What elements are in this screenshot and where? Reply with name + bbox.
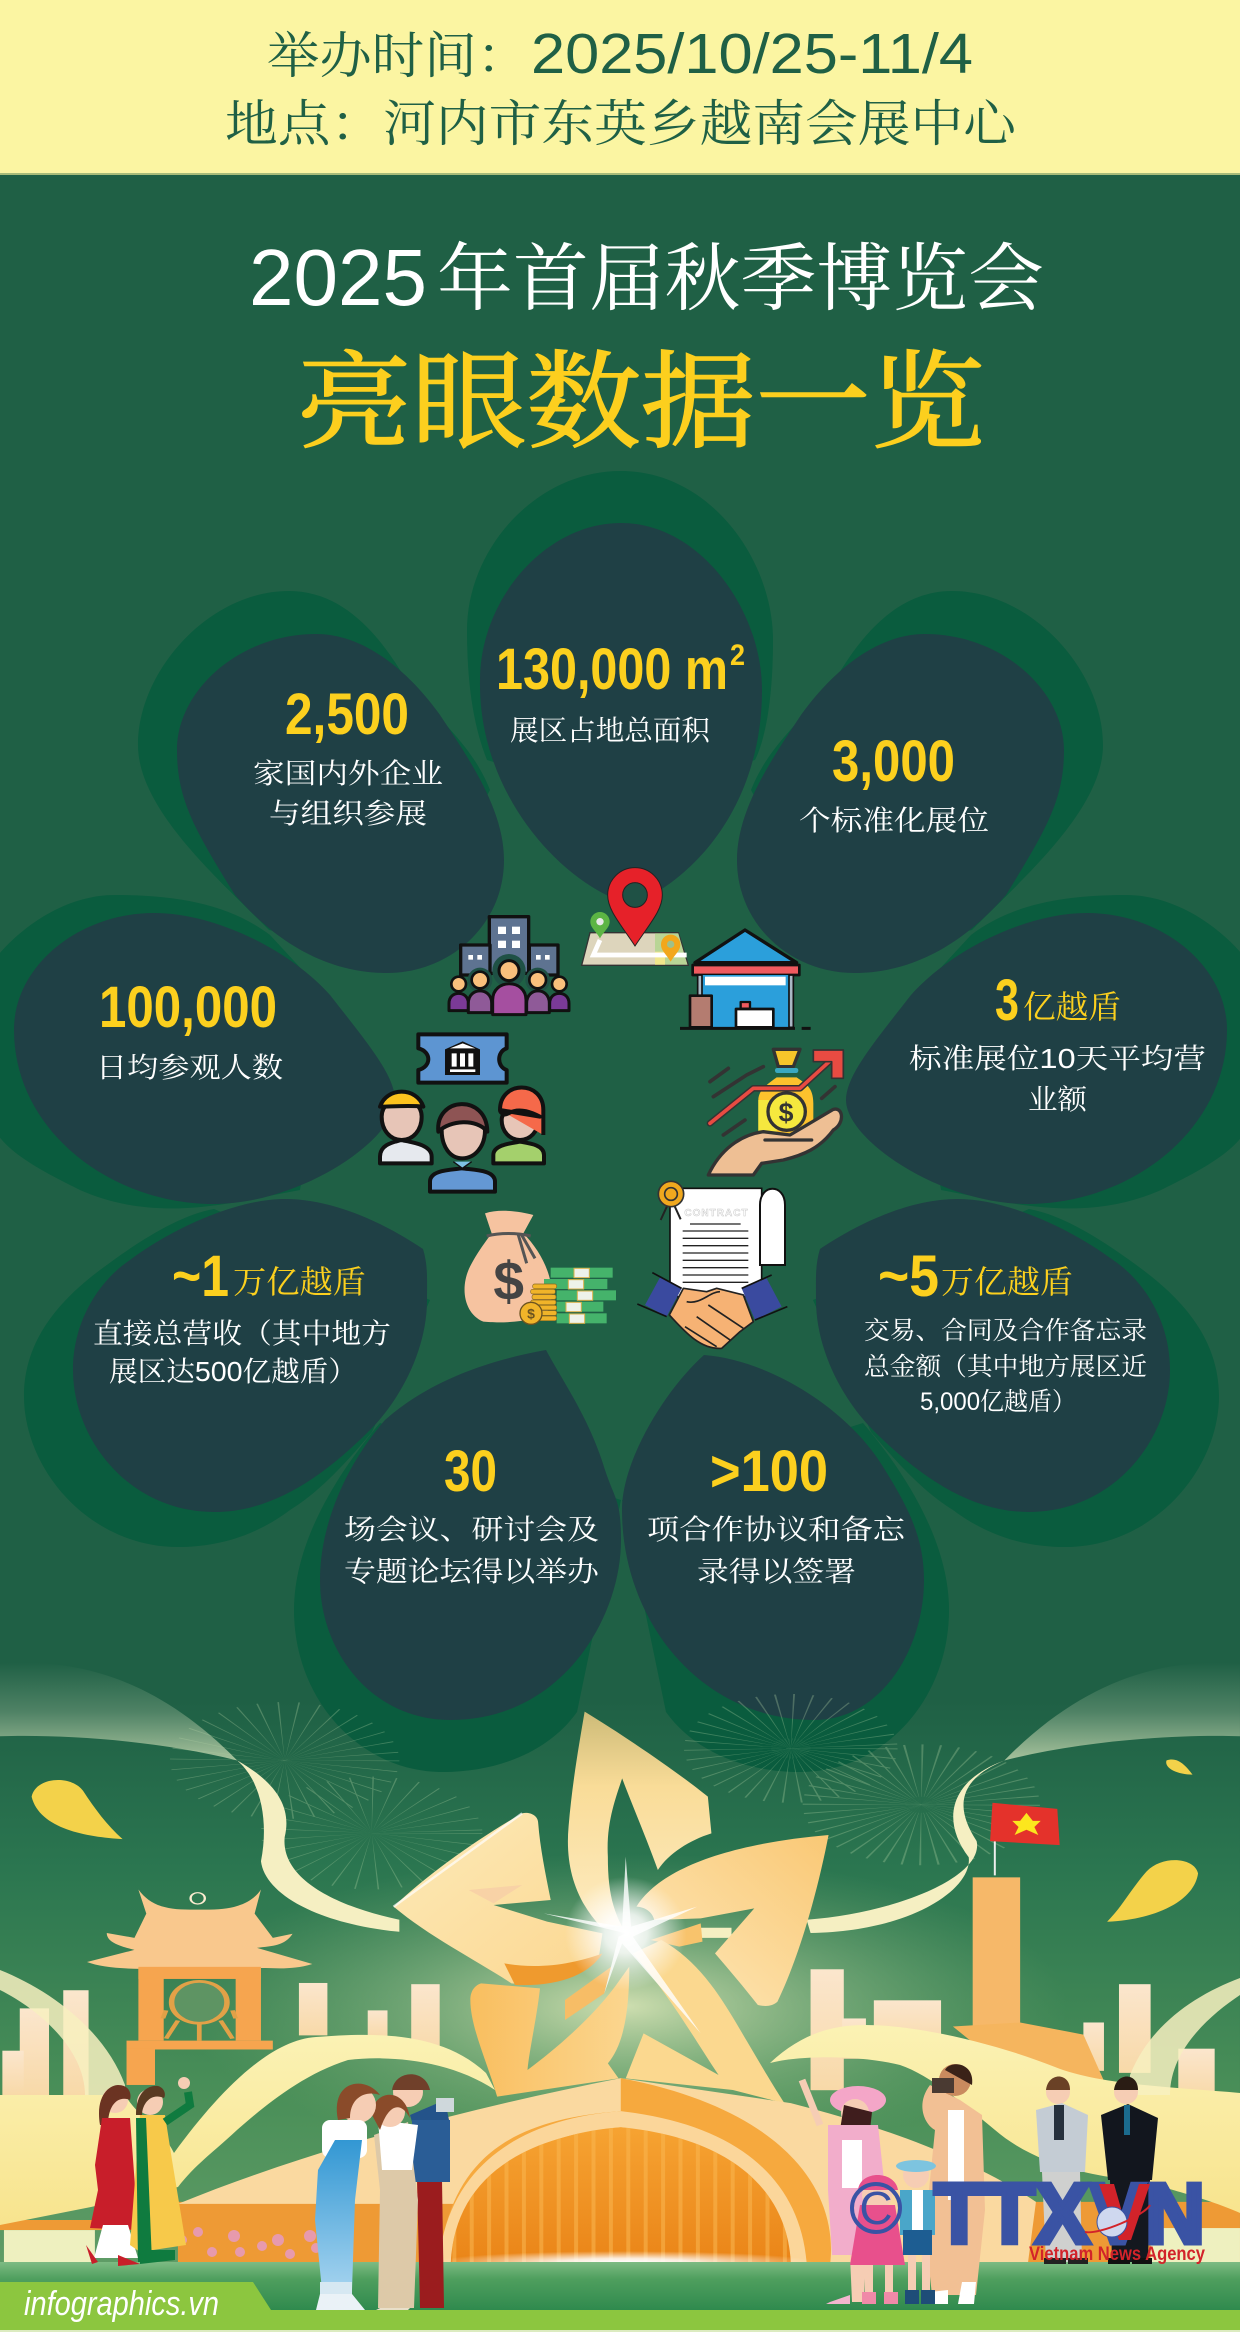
stat: 130,000 m2 exhibition area: 2 [730,639,745,672]
icon: money bag with cash and coins: $ [527,1306,535,1322]
illustration: exhibition hall and waves [0,1970,1240,2274]
icon: contract and handshake [637,1181,787,1348]
site name: infographics.vn [24,2285,219,2323]
stat: about 5 trillion VND contracts: ~5 [878,1244,939,1309]
people: women in ao dai [86,2077,190,2266]
stat: about 1 trillion VND direct revenue [93,1244,391,1387]
icon: ticket [418,1034,507,1083]
banner: date and venue [0,0,1240,175]
icon: visitors [380,1087,544,1192]
stat: over 100 agreements: 项合作协议和备忘 [647,1514,906,1545]
stat: about 5 trillion VND contracts: 交易、合同及合作备忘录 [864,1317,1147,1345]
stat: 3,000 booths: 个标准化展位 [799,805,989,836]
fireworks [229,1726,973,1861]
icon: hand holding money with rising arrow [708,1049,843,1175]
pagoda [87,1889,312,2085]
people: two businessmen [1036,2076,1158,2264]
stat: about 5 trillion VND contracts: 万亿越盾 [941,1264,1073,1300]
people: selfie group [315,2074,454,2310]
stat: about 1 trillion VND direct revenue: 直接总营收（其中地方 [93,1318,391,1349]
title: 年首届秋季博览会 [437,237,1044,320]
stat: about 1 trillion VND direct revenue: 展区达500亿越盾） [109,1356,357,1387]
stat: 100,000 daily visitors [96,975,283,1083]
stat: 130,000 m2 exhibition area: 展区占地总面积 [510,715,711,746]
stat: 30 conferences: 专题论坛得以举办 [344,1556,600,1587]
central star sculpture [394,1712,829,2103]
stat: 2,500 exhibitors: 2,500 [285,682,409,747]
title [249,233,1044,322]
footer strip with site tag [0,2282,1240,2332]
people: family with camera [802,2064,985,2304]
icon: exhibition booth [680,930,811,1028]
date line [267,22,973,86]
logo: TTXVN watermark: C [859,2182,893,2234]
stat: over 100 agreements [647,1439,906,1587]
stat: over 100 agreements: 录得以签署 [697,1556,856,1587]
skyline [2,1969,1215,2097]
stat: 300 million VND booth revenue: 亿越盾 [1023,989,1121,1025]
logo: TTXVN watermark: TTXVN [934,2167,1205,2262]
stat: about 5 trillion VND contracts: 5,000亿越盾） [920,1388,1076,1416]
icon: map with location pin [582,868,688,965]
title: 2025 [249,233,427,322]
icon: buildings and group of people [449,917,569,1015]
stat: 2,500 exhibitors: 与组织参展 [269,798,427,829]
stat: 100,000 daily visitors: 日均参观人数 [96,1052,283,1083]
date line: 2025/10/25-11/4 [531,22,973,86]
icon: money bag with cash and coins: $ [493,1250,524,1312]
stat: over 100 agreements: >100 [710,1439,828,1504]
stat: about 5 trillion VND contracts: 总金额（其中地方展区近 [864,1353,1147,1381]
subtitle: 亮眼数据一览 [297,344,985,462]
icon: money bag with cash and coins [465,1211,616,1324]
stat: 3,000 booths: 3,000 [832,729,955,794]
stat: 300 million VND booth revenue: 业额 [1028,1084,1088,1115]
stat: 30 conferences: 场会议、研讨会及 [344,1514,599,1545]
pale wave ribbon right [770,2025,1240,2213]
stat: 300 million VND booth revenue: 标准展位10天平均营 [909,1043,1206,1074]
stat: 30 conferences: 30 [444,1439,497,1504]
logo: TTXVN watermark: Vietnam News Agency [1029,2244,1205,2265]
exhibition hall [0,2078,1240,2274]
side ribbon loops [0,1970,1240,2095]
stat: 130,000 m2 exhibition area: 130,000 m [496,637,728,702]
pale wave ribbon left [0,2035,495,2225]
flower petals: inner slate layer [14,523,1227,1720]
ribbons [237,1760,1004,1938]
stat: 300 million VND booth revenue: 3 [995,968,1019,1033]
flag tower and flag [953,1803,1104,2081]
stat: 3,000 booths [799,729,989,836]
central icons ring [380,868,843,1348]
stat: about 1 trillion VND direct revenue: 万亿越盾 [233,1264,366,1300]
illustration background: sky and ribbons [0,1663,1240,2264]
icon: hand holding money with rising arrow: $ [779,1098,794,1128]
falling leaves [32,1760,1198,1922]
stat: 130,000 m2 exhibition area [496,637,745,746]
ground [0,2262,1240,2310]
stat: about 5 trillion VND contracts [864,1244,1147,1416]
date line: 举办时间： [267,28,529,84]
stat: 2,500 exhibitors [253,682,443,829]
venue line: 地点：河内市东英乡越南会展中心 [225,96,1018,152]
stat: 2,500 exhibitors: 家国内外企业 [253,758,443,789]
flower petals: outer dark green layer [0,471,1240,1772]
icon: contract and handshake: CONTRACT [684,1208,748,1219]
stat: about 1 trillion VND direct revenue: ~1 [172,1244,229,1309]
stat: 100,000 daily visitors: 100,000 [99,975,277,1040]
illustration: expo scene [2,1726,1215,2097]
stat: 30 conferences [344,1439,600,1587]
flower bed [177,2227,321,2259]
stat: 300 million VND booth revenue [909,968,1206,1115]
